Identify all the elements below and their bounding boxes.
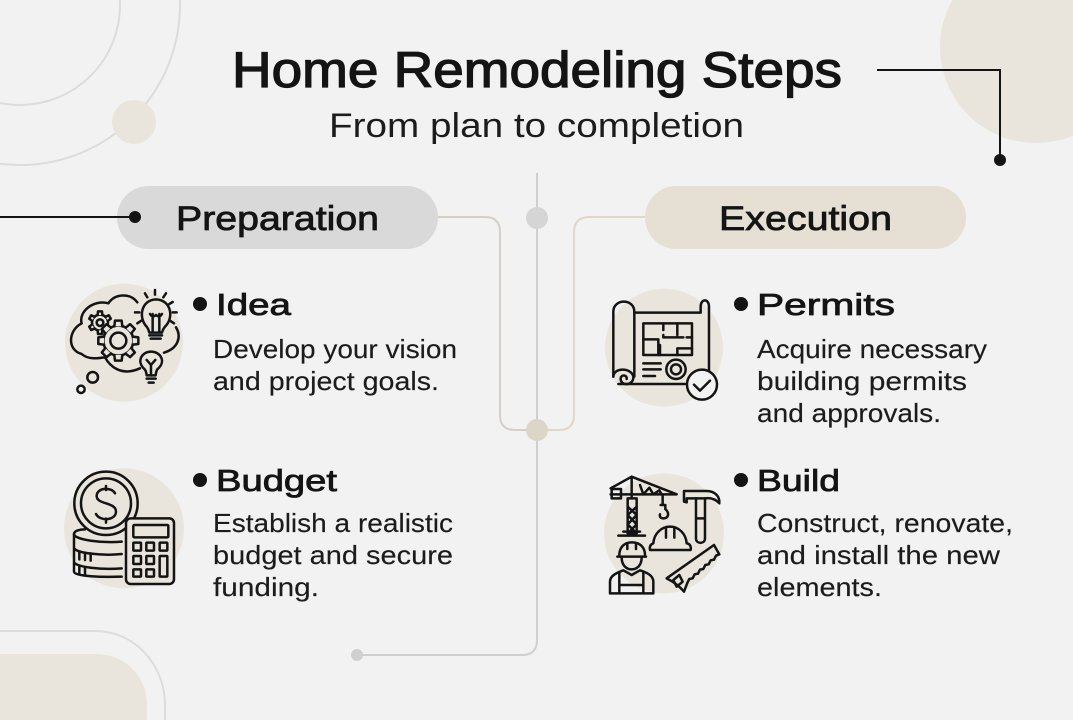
idea description: Develop your vision bbox=[213, 334, 457, 364]
execution pill bbox=[645, 186, 966, 249]
subtitle: From plan to completion bbox=[329, 107, 744, 145]
idea heading bbox=[193, 287, 292, 322]
permits description bbox=[757, 334, 987, 428]
preparation pill bbox=[0, 186, 438, 249]
budget heading bbox=[193, 463, 337, 498]
build description bbox=[757, 508, 1013, 602]
budget description: budget and secure bbox=[213, 540, 453, 570]
idea description: and project goals. bbox=[213, 366, 439, 396]
budget description: Establish a realistic bbox=[213, 508, 453, 538]
build description: Construct, renovate, bbox=[757, 508, 1013, 538]
build heading bbox=[734, 463, 840, 498]
title: Home Remodeling Steps bbox=[232, 42, 842, 98]
build heading: Build bbox=[757, 463, 840, 498]
connector lines bbox=[351, 173, 645, 661]
icon: permits bbox=[605, 289, 723, 407]
arrow: title connector bbox=[877, 70, 1006, 166]
build description: and install the new bbox=[757, 540, 1000, 570]
permits description: Acquire necessary bbox=[757, 334, 987, 364]
budget heading: Budget bbox=[216, 463, 337, 498]
execution pill: Execution bbox=[719, 200, 892, 238]
icon: idea bbox=[65, 284, 183, 402]
idea heading: Idea bbox=[216, 287, 292, 322]
idea description bbox=[213, 334, 457, 396]
panel: preparation bbox=[0, 186, 457, 602]
permits heading: Permits bbox=[757, 287, 895, 322]
permits description: and approvals. bbox=[757, 398, 941, 428]
icon: build bbox=[604, 473, 724, 593]
icon: budget bbox=[64, 468, 184, 588]
permits heading bbox=[734, 287, 895, 322]
preparation pill: Preparation bbox=[176, 200, 379, 238]
permits description: building permits bbox=[757, 366, 967, 396]
build description: elements. bbox=[757, 572, 882, 602]
budget description bbox=[213, 508, 453, 602]
panel: execution bbox=[604, 186, 1013, 602]
budget description: funding. bbox=[213, 572, 319, 602]
